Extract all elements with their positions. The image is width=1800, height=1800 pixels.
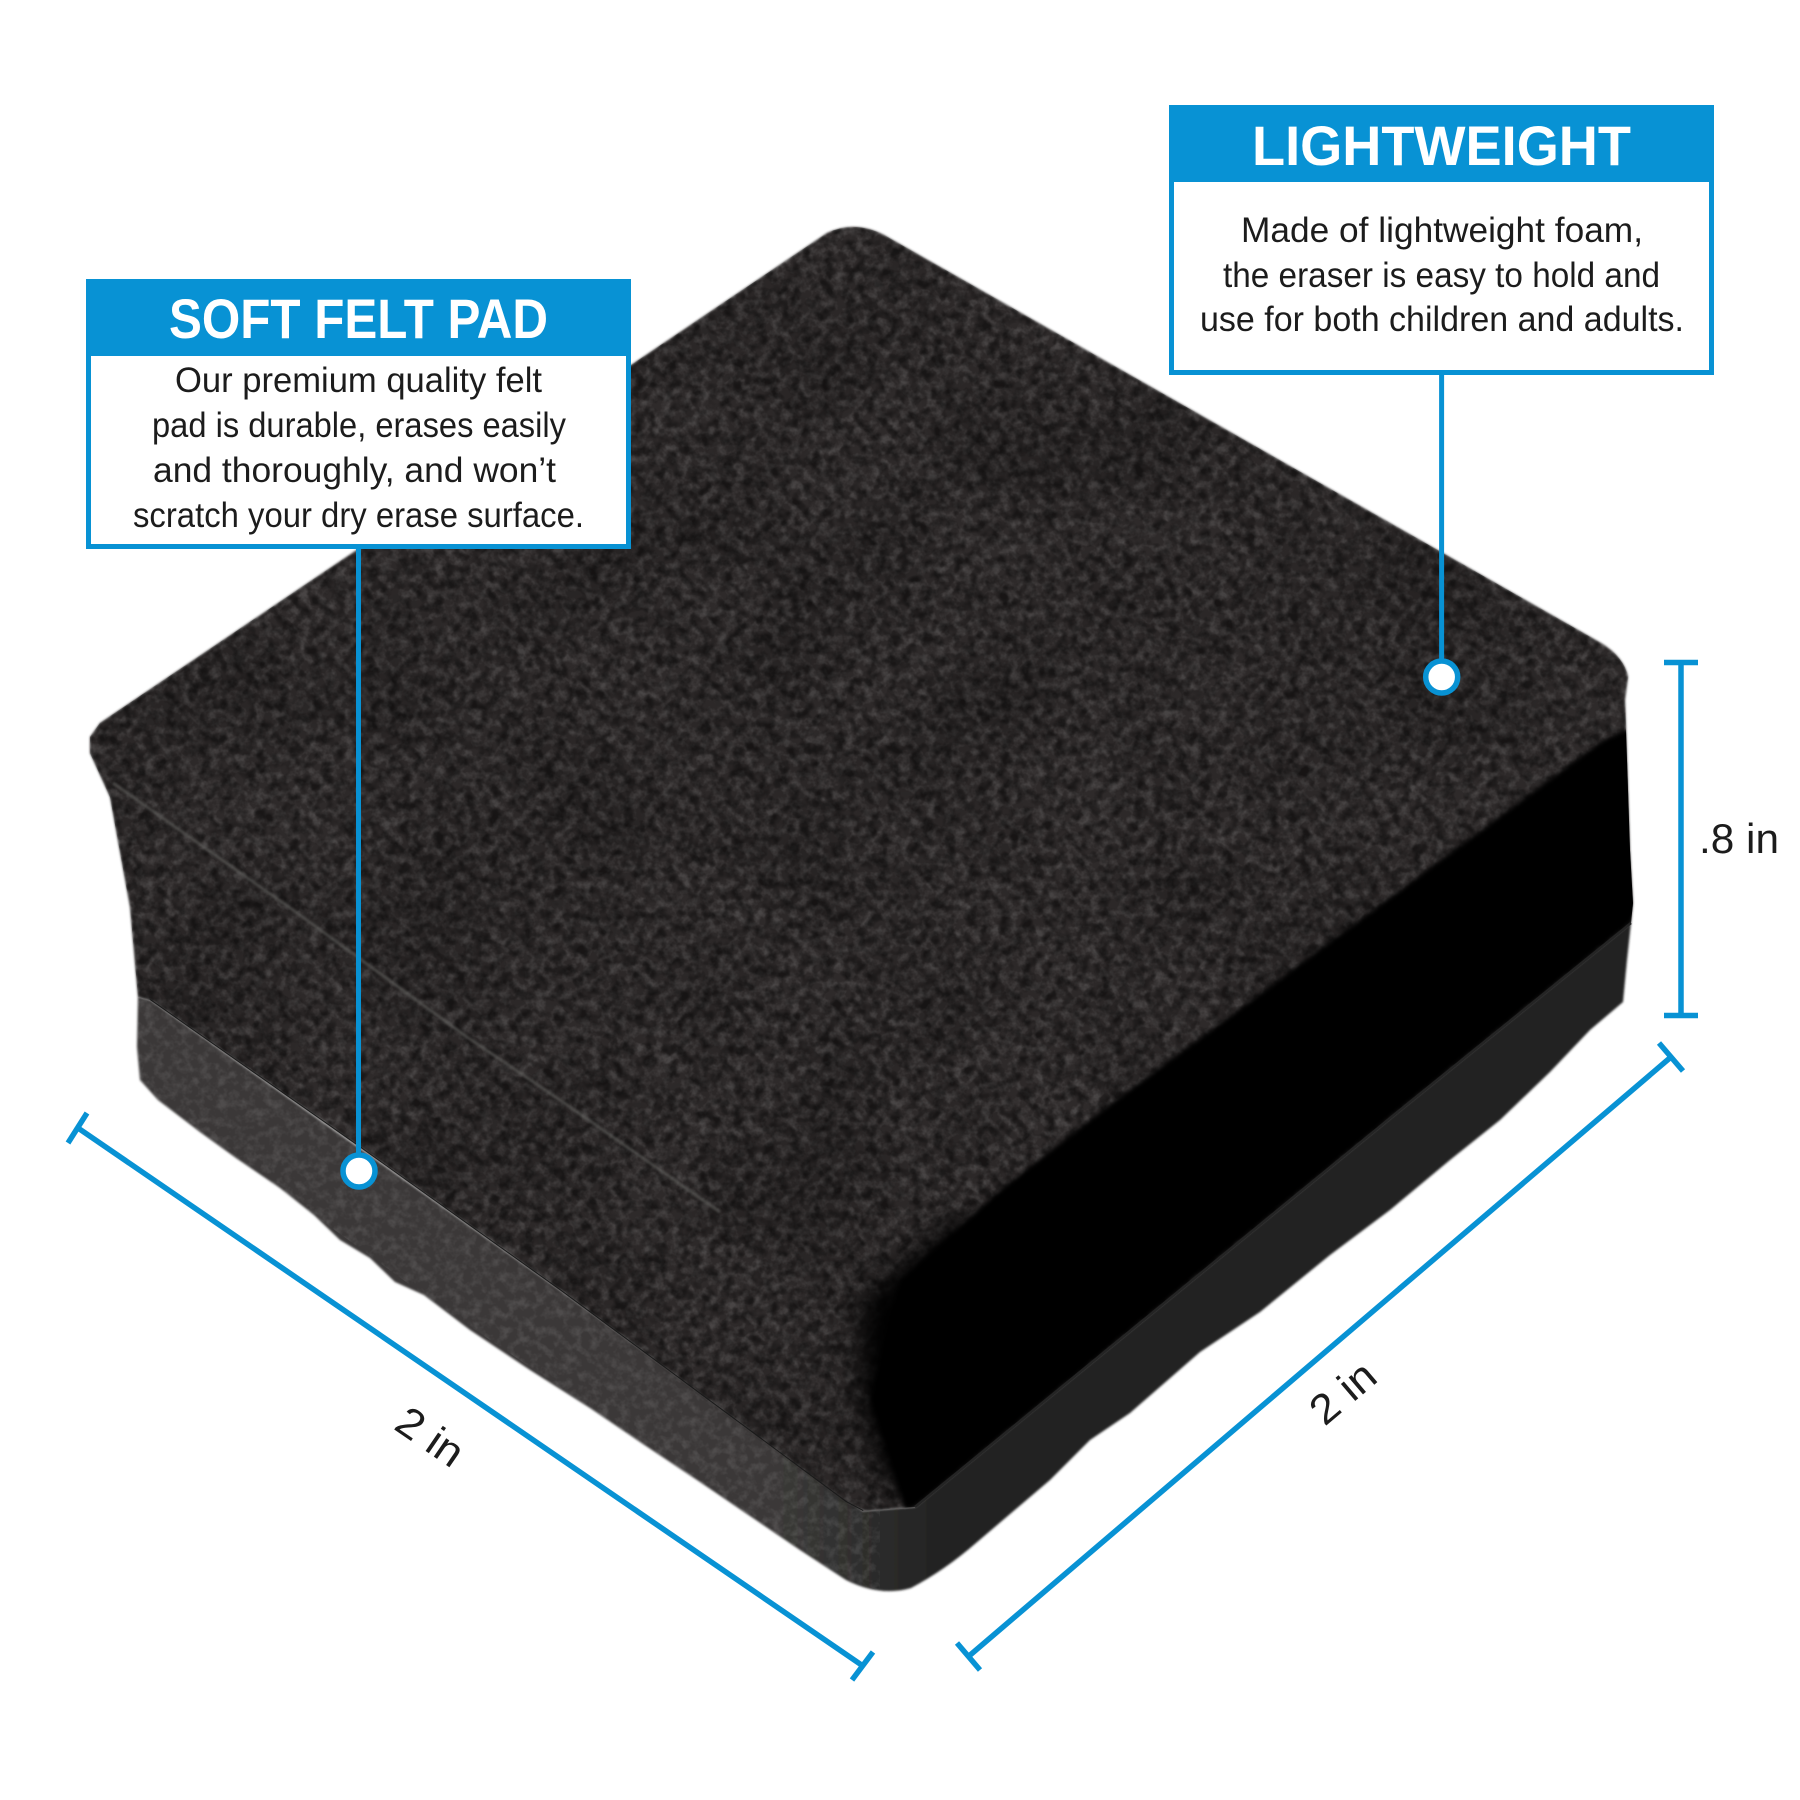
body text: lightweight: the eraser is easy to hold and [1223,256,1660,295]
shadow near corner [845,1208,972,1508]
body text: lightweight [1200,211,1684,339]
foam body [90,227,1633,1511]
leader: soft felt pad [343,545,375,1187]
black side face [870,725,1640,1510]
felt pad texture [120,980,900,1600]
body text: soft felt pad: scratch your dry erase surface. [133,496,584,535]
body text: soft felt pad: Our premium quality felt [175,361,542,400]
body text: lightweight: use for both children and adults. [1200,300,1684,339]
dimension label: right width: 2 in [1300,1351,1385,1434]
callout: soft felt pad [86,279,631,549]
eraser photo [60,200,1660,1600]
body text: soft felt pad: pad is durable, erases easily [152,406,566,445]
felt edge against black face [915,923,1631,1507]
heading: soft felt pad: SOFT FELT PAD [169,287,548,350]
felt pad [137,923,1631,1591]
seam line [113,783,720,1212]
foam texture and side shading [60,200,1660,1550]
callout: lightweight [1169,105,1714,375]
leader: lightweight [1426,372,1458,693]
body text: lightweight: Made of lightweight foam, [1241,211,1643,250]
felt boundary line [150,1000,863,1511]
dimension: left depth bracket [68,1113,873,1680]
body text: soft felt pad: and thoroughly, and won’t [153,451,556,490]
dimension: height bracket [1664,662,1698,1016]
dimension label: height: .8 in [1699,815,1779,862]
dimension label: left depth: 2 in [387,1397,473,1476]
dimension: right width bracket [957,1043,1683,1670]
heading: lightweight: LIGHTWEIGHT [1252,114,1631,177]
body text: soft felt pad [133,361,584,535]
